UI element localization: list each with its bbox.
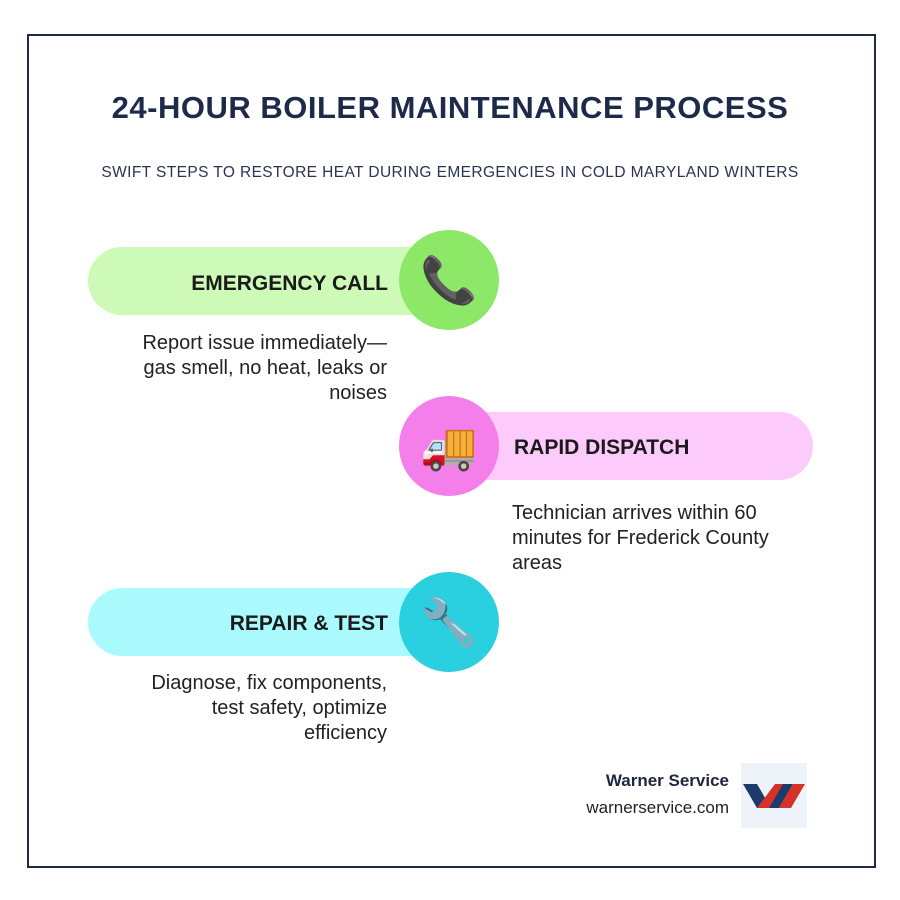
label: EMERGENCY CALL [191,272,388,295]
label: RAPID DISPATCH [514,436,689,459]
step 1: emergency call [88,230,499,330]
description 3: test safety, optimize [212,697,387,719]
description 1: noises [329,382,387,404]
logo [741,763,807,828]
icon: phone: 📞 [420,254,478,306]
step 2: rapid dispatch [399,396,813,496]
brand text: Warner Service [606,771,729,790]
description 1: gas smell, no heat, leaks or [144,357,387,379]
description 2: Technician arrives within 60 [512,502,757,524]
pill [88,247,458,315]
description 1: Report issue immediately— [142,332,387,354]
icon: wrench [399,572,499,672]
description 3 [151,672,387,744]
step 3: repair & test [88,572,499,672]
description 3: Diagnose, fix components, [151,672,387,694]
brand text: warnerservice.com [586,798,729,817]
icon: phone [399,230,499,330]
title: 24-HOUR BOILER MAINTENANCE PROCESS [112,90,788,125]
subtitle: SWIFT STEPS TO RESTORE HEAT DURING EMERGENCIES IN COLD MARYLAND WINTERS [101,164,799,181]
icon: truck [399,396,499,496]
label: REPAIR & TEST [230,612,388,635]
icon: wrench: 🔧 [420,596,478,648]
description 2: areas [512,552,562,574]
description 1 [142,332,387,404]
description 2 [512,502,769,574]
pill [88,588,458,656]
brand text [586,771,729,817]
icon: truck: 🚚 [420,420,478,472]
description 2: minutes for Frederick County [512,527,769,549]
pill [439,412,813,480]
description 3: efficiency [304,722,387,744]
